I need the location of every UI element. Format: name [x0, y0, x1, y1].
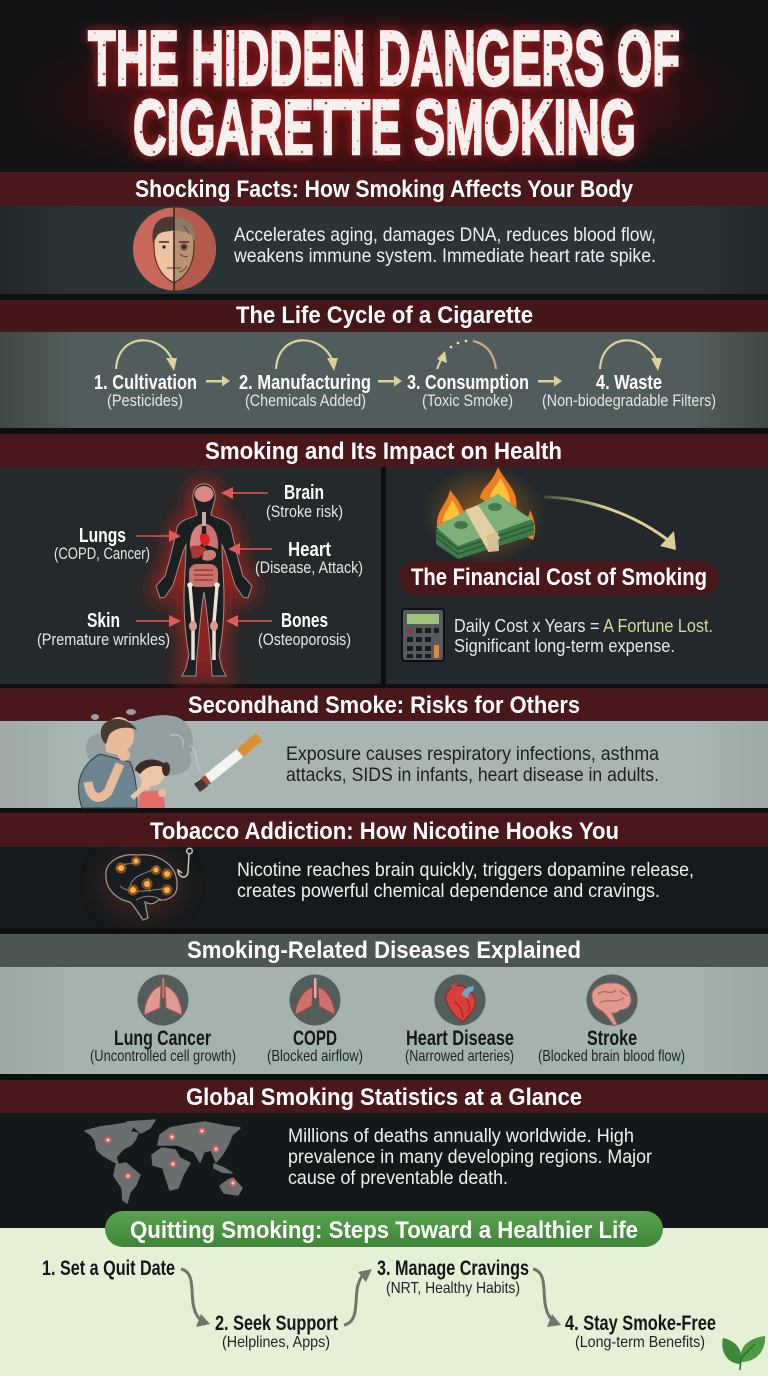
step 3: consumption [407, 340, 529, 410]
heading: impact on health: Smoking and Its Impact on Health [205, 438, 562, 465]
arrow: money to cost [544, 497, 676, 550]
callout: bones: Bones [281, 609, 328, 632]
heading: tobacco addiction [0, 813, 768, 847]
map: world with hot spots [85, 1120, 242, 1203]
callout: heart: (Disease, Attack) [255, 559, 363, 577]
step 3: consumption: 3. Consumption [407, 371, 529, 394]
item: heart disease [405, 974, 514, 1065]
step 1: cultivation [94, 340, 197, 410]
text: financial cost: Daily Cost x Years = A Fortune Lost. [454, 616, 713, 636]
item: stroke: Stroke [587, 1027, 637, 1050]
heading: shocking facts [0, 172, 768, 206]
step 3: manage cravings: 3. Manage Cravings [377, 1257, 529, 1280]
item: heart disease: Heart Disease [406, 1027, 514, 1050]
step 4: waste: 4. Waste [596, 371, 662, 394]
item: lung cancer: (Uncontrolled cell growth) [90, 1048, 236, 1065]
arrow: step 2 to 3 [344, 1269, 372, 1325]
step 1: cultivation: 1. Cultivation [94, 371, 197, 394]
callout: brain: (Stroke risk) [266, 503, 343, 521]
item: copd: COPD [293, 1027, 337, 1050]
arrow: step 1 to 2 [206, 376, 230, 386]
heading: global statistics [0, 1080, 768, 1113]
item: lung cancer: Lung Cancer [114, 1027, 211, 1050]
text: global statistics: cause of preventable death. [288, 1167, 508, 1189]
heading: financial cost: The Financial Cost of Smoking [411, 564, 707, 591]
text: tobacco addiction [237, 859, 694, 902]
item: lung cancer [90, 974, 236, 1065]
step 4: waste: (Non-biodegradable Filters) [542, 392, 716, 410]
step 1: cultivation: (Pesticides) [107, 392, 183, 410]
callout: heart [228, 538, 363, 577]
icon: half young half aged face [133, 208, 216, 290]
step 3: consumption: (Toxic Smoke) [422, 392, 513, 410]
text: secondhand smoke: Exposure causes respiratory infections, asthma [286, 743, 659, 765]
text: secondhand smoke [286, 743, 659, 786]
heading: life cycle [0, 300, 768, 332]
arrow: step 1 to 2 [181, 1269, 210, 1327]
step 2: manufacturing [239, 340, 371, 410]
step 4: stay smoke-free: (Long-term Benefits) [575, 1334, 705, 1351]
text: financial cost [454, 616, 713, 656]
text: tobacco addiction: creates powerful chemical dependence and cravings. [237, 880, 660, 902]
callout: lungs: Lungs [79, 524, 126, 547]
item: stroke: (Blocked brain blood flow) [538, 1048, 685, 1065]
icon: green leaves [722, 1336, 765, 1370]
step 2: seek support: 2. Seek Support [215, 1312, 338, 1335]
text: secondhand smoke: attacks, SIDS in infants, heart disease in adults. [286, 764, 659, 786]
icon: burning cigarette [197, 737, 259, 788]
panel: smoking-related diseases [0, 934, 768, 1074]
heading: life cycle: The Life Cycle of a Cigarette [236, 302, 533, 329]
arrow: step 2 to 3 [378, 376, 402, 386]
panel: body health impacts [0, 467, 381, 684]
title block [0, 0, 768, 200]
arrow: step 3 to 4 [538, 376, 562, 386]
callout: lungs [54, 524, 181, 563]
step 4: stay smoke-free [565, 1312, 716, 1351]
heading: shocking facts: Shocking Facts: How Smoking Affects Your Body [135, 176, 634, 203]
panel: global statistics [0, 1080, 768, 1228]
callout: skin [37, 609, 181, 649]
panel: financial cost [386, 465, 768, 684]
text: shocking facts: weakens immune system. Immediate heart rate spike. [233, 245, 656, 267]
step 2: seek support: (Helplines, Apps) [222, 1334, 330, 1351]
text: tobacco addiction: Nicotine reaches brain quickly, triggers dopamine release, [237, 859, 694, 881]
text: shocking facts: Accelerates aging, damages DNA, reduces blood flow, [234, 224, 656, 246]
illustration: father and child coughing in smoke [79, 709, 200, 808]
callout: bones [226, 609, 351, 649]
heading: financial cost [399, 561, 719, 595]
callout: skin: (Premature wrinkles) [37, 631, 170, 649]
heading: impact on health [0, 434, 768, 467]
text: global statistics: Millions of deaths annually worldwide. High [288, 1125, 634, 1147]
heading: secondhand smoke [0, 688, 768, 721]
step 3: manage cravings [377, 1257, 529, 1297]
icon: brain with hook [100, 848, 192, 920]
callout: skin: Skin [87, 609, 120, 632]
item: copd [267, 974, 363, 1065]
text: global statistics: prevalence in many developing regions. Major [288, 1146, 652, 1168]
callout: bones: (Osteoporosis) [258, 631, 351, 649]
callout: heart: Heart [288, 538, 331, 561]
step 1: set a quit date: 1. Set a Quit Date [42, 1257, 175, 1280]
panel: life cycle of a cigarette [0, 300, 768, 428]
step 2: manufacturing: 2. Manufacturing [239, 371, 371, 394]
panel: tobacco addiction [0, 813, 768, 928]
heading: tobacco addiction: Tobacco Addiction: How Nicotine Hooks You [150, 818, 619, 845]
figure: human body with organs [156, 484, 252, 676]
panel: secondhand smoke [0, 688, 768, 808]
heading: global statistics: Global Smoking Statistics at a Glance [186, 1084, 582, 1111]
arrow: step 3 to 4 [533, 1269, 561, 1327]
callout: lungs: (COPD, Cancer) [54, 545, 150, 563]
text: global statistics [288, 1125, 652, 1189]
heading: secondhand smoke: Secondhand Smoke: Risks for Others [188, 692, 580, 719]
panel: shocking facts [0, 172, 768, 294]
step 2: seek support [215, 1312, 338, 1351]
heading: quitting pill: Quitting Smoking: Steps Toward a Healthier Life [130, 1217, 638, 1244]
item: heart disease: (Narrowed arteries) [405, 1048, 514, 1065]
text: shocking facts [233, 224, 656, 267]
callout: brain: Brain [284, 481, 324, 504]
step 4: waste [542, 340, 716, 410]
step 4: stay smoke-free: 4. Stay Smoke-Free [565, 1312, 716, 1335]
text: financial cost: Significant long-term expense. [454, 636, 675, 656]
panel: quitting smoking [0, 1211, 768, 1376]
item: stroke [538, 974, 685, 1065]
heading: diseases: Smoking-Related Diseases Explained [187, 937, 581, 964]
step 2: manufacturing: (Chemicals Added) [245, 392, 366, 410]
item: copd: (Blocked airflow) [267, 1048, 363, 1065]
icon: calculator [402, 609, 444, 661]
heading: diseases [0, 934, 768, 967]
step 3: manage cravings: (NRT, Healthy Habits) [386, 1280, 520, 1297]
callout: brain [221, 481, 343, 521]
icon: burning money [422, 465, 546, 565]
